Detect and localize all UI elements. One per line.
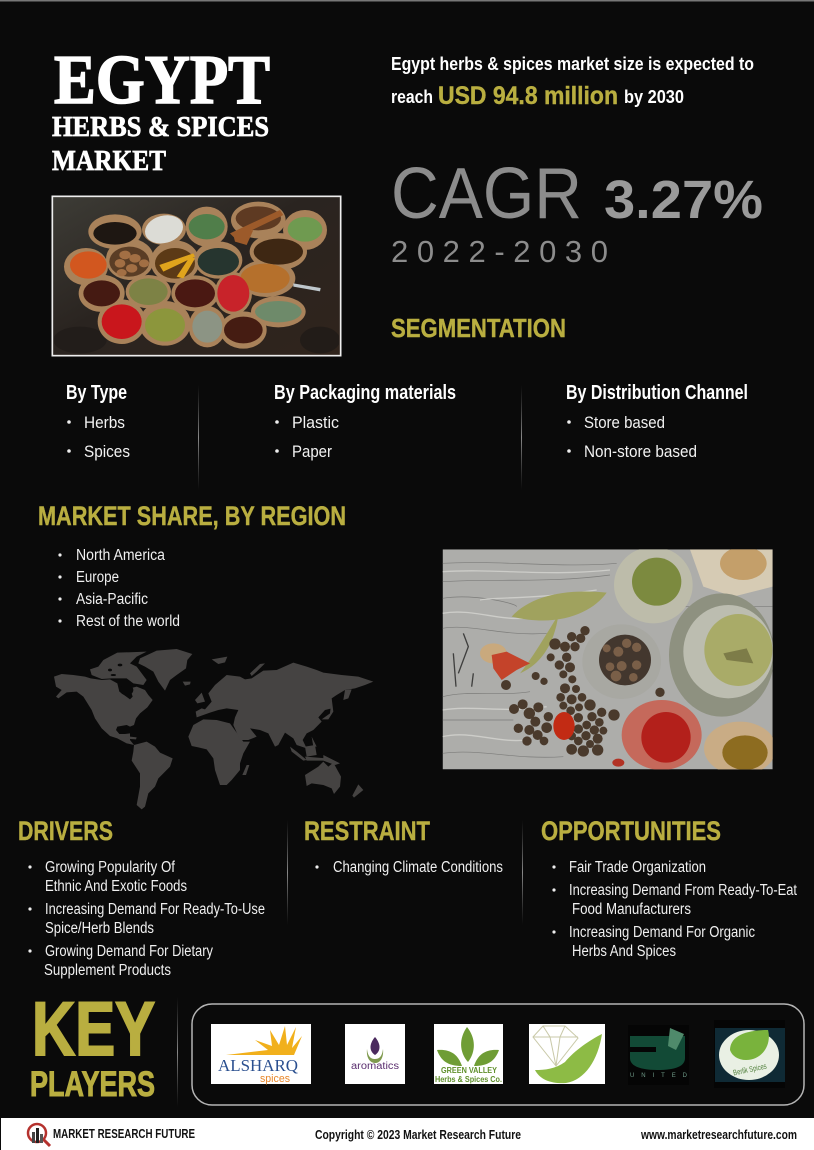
segment: by distribution: Non-store based [584,442,697,461]
panel: drivers: Spice/Herb Blends [45,920,154,937]
region list: Europe [76,569,119,586]
logo: United [628,1025,689,1085]
region list [58,547,180,630]
heading: key players: KEY [32,987,155,1072]
segment: by distribution: Store based [584,413,665,432]
panel: drivers: DRIVERS [18,816,113,846]
logo: Berlik Spices: Berlik Spices [732,1062,767,1077]
panel: restraint: Changing Climate Conditions [333,859,503,876]
region list: North America [76,547,165,564]
segment: by type [66,382,130,461]
panel: drivers: Supplement Products [44,962,171,979]
panel: key player logos [192,1004,804,1105]
segment: by type: Spices [84,442,130,461]
panel: opportunities: Fair Trade Organization [569,859,706,876]
logo: Green Valley: Herbs & Spices Co. [435,1075,502,1084]
CAGR: CAGR [391,154,582,234]
bay leaves [512,592,607,673]
segment: by packaging: Paper [292,442,332,461]
panel: restraint: RESTRAINT [304,816,430,846]
segment: by packaging: By Packaging materials [274,382,456,404]
title: HERBS & SPICES [52,112,269,143]
world map [54,649,373,809]
logo: Green Valley: GREEN VALLEY [441,1066,498,1075]
market size statement: Egypt herbs & spices market size is expected to [391,54,754,74]
logo: United: UNITED [630,1073,688,1079]
CAGR [391,154,763,269]
logo: Alsharq [211,1024,311,1085]
market size statement: reach [391,87,433,107]
footer [1,1118,814,1150]
panel: restraint [304,816,503,876]
market size statement: USD 94.8 million [438,82,618,110]
region list: Rest of the world [76,613,180,630]
market size statement [391,54,754,110]
segment: by type: By Type [66,382,127,404]
logo: diamond leaf [529,1024,605,1084]
logo: aromatics: aromatics [351,1061,399,1072]
panel: opportunities: Food Manufacturers [572,901,691,918]
panel: drivers [18,816,265,979]
CAGR: 2022-2030 [391,234,608,269]
paper bags [64,202,327,349]
logo: Green Valley [434,1024,503,1084]
peppercorns [501,626,665,757]
spice fills [93,222,137,245]
segment: by packaging [274,382,456,461]
photo: spice bags [52,196,341,356]
logo: Berlik Spices [714,1020,785,1088]
panel: drivers: Ethnic And Exotic Foods [45,878,187,895]
footer: MARKET RESEARCH FUTURE [53,1126,195,1141]
CAGR: 3.27% [604,170,763,230]
heading: key players: PLAYERS [30,1065,155,1104]
market size statement: by 2030 [624,87,684,107]
heading: segmentation: SEGMENTATION [391,313,566,343]
title: EGYPT [54,42,270,119]
segment: by distribution [566,382,748,461]
heading: key players [30,987,155,1104]
panel: opportunities: OPPORTUNITIES [541,816,721,846]
logo: Alsharq: ALSHARQ [218,1056,298,1075]
jars [614,547,693,623]
panel: opportunities: Increasing Demand For Organic [569,924,755,941]
logo: aromatics [345,1024,405,1084]
region list: Asia-Pacific [76,591,148,608]
segment: by packaging: Plastic [292,413,339,432]
logo: Alsharq: spices [260,1073,290,1085]
segment: by distribution: By Distribution Channel [566,382,748,404]
title: MARKET [52,146,166,177]
segment: by type: Herbs [84,413,125,432]
title [52,42,270,177]
photo: spice jars [443,547,776,775]
panel: drivers: Growing Popularity Of [45,859,176,876]
panel: opportunities [541,816,798,960]
icon: magnifier logo [28,1124,50,1146]
footer: Copyright © 2023 Market Research Future [315,1127,521,1142]
heading: market share: MARKET SHARE, BY REGION [38,501,346,531]
panel: drivers: Growing Demand For Dietary [45,943,213,960]
panel: drivers: Increasing Demand For Ready-To-Use [45,901,265,918]
panel: opportunities: Herbs And Spices [572,943,676,960]
